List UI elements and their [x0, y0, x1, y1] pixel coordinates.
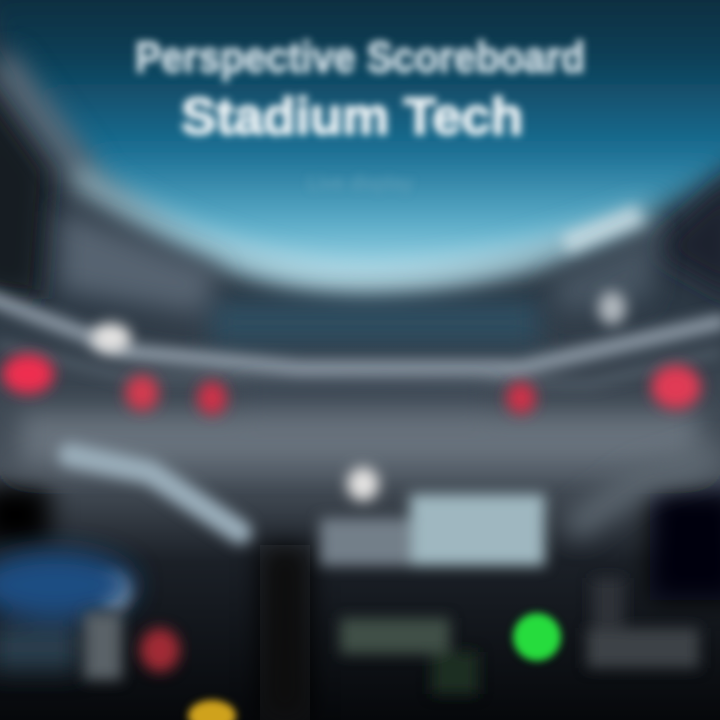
- white lights: [91, 291, 626, 610]
- left dark corner: [0, 60, 50, 300]
- console panels: [84, 578, 699, 694]
- right stand strip: [570, 455, 720, 530]
- blue seating: [0, 551, 135, 670]
- red console light: [140, 628, 180, 672]
- roof band: [0, 298, 720, 384]
- middle stands: [0, 388, 720, 720]
- right dark stands: [650, 170, 720, 300]
- yellow light: [188, 700, 236, 720]
- central scoreboard screen: [320, 494, 545, 566]
- green light: [513, 613, 561, 661]
- subtitle: Live display: [308, 173, 412, 195]
- bright rim of the dome: [0, 60, 650, 282]
- title: [135, 33, 585, 146]
- bright rim highlight: [565, 215, 640, 245]
- title: Stadium Tech: [181, 88, 523, 146]
- sky dome: [0, 0, 720, 290]
- red lights: [2, 354, 701, 415]
- upper stands: [60, 210, 660, 345]
- title: Perspective Scoreboard: [135, 33, 585, 82]
- diagonal walkway: [70, 455, 240, 532]
